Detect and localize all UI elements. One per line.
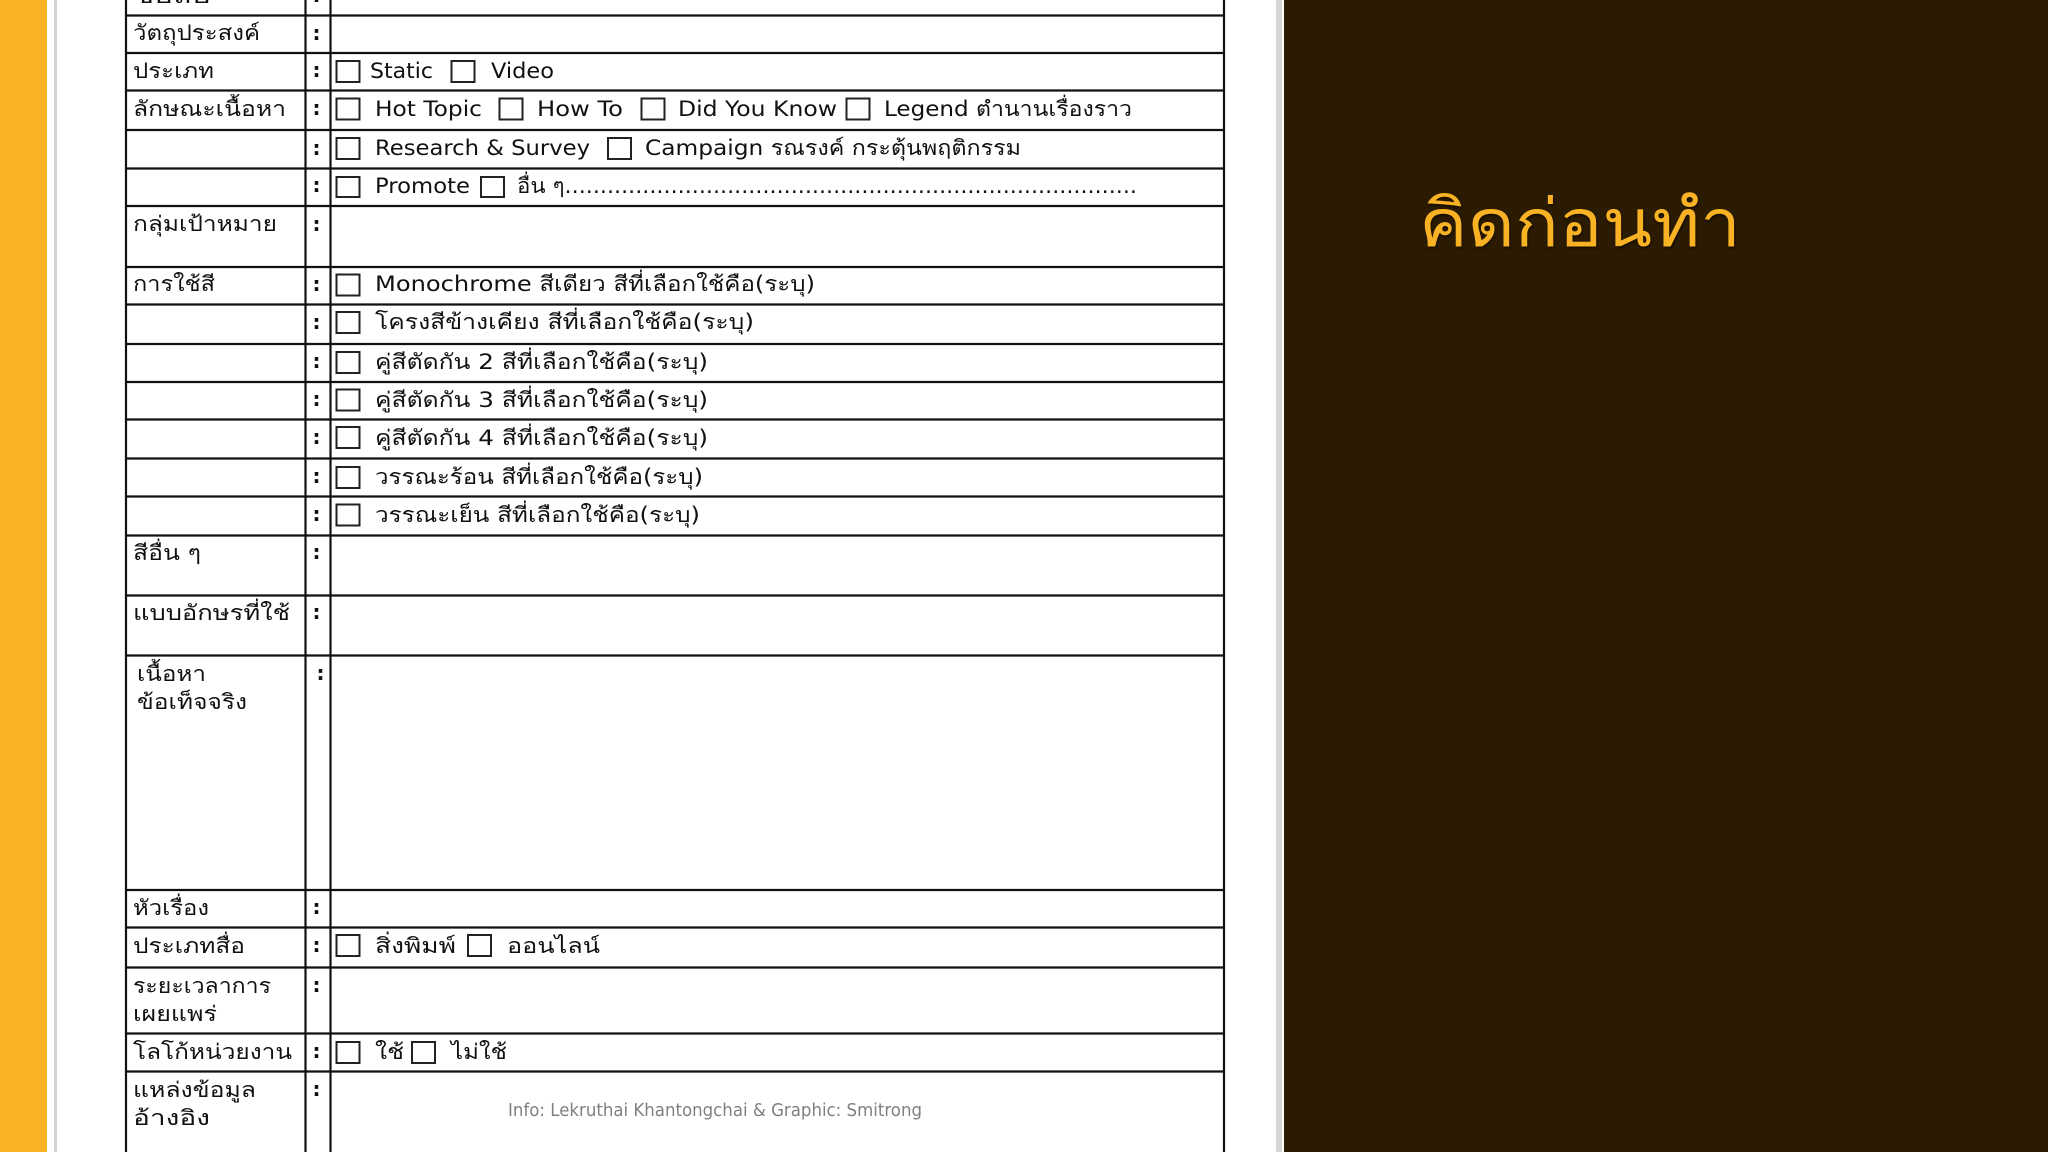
row: content character: Hot Topic	[375, 97, 482, 121]
row: colour monochrome: :	[312, 272, 320, 296]
row: research and campaign: Campaign รณรงค์ กระตุ้นพฤติกรรม	[645, 136, 1021, 161]
row: headline: หัวเรื่อง	[133, 893, 209, 920]
row: headline	[133, 893, 320, 920]
row: contrast 2 colours: :	[312, 349, 320, 373]
row: typeface	[133, 598, 320, 625]
row: contrast 4 colours: :	[312, 425, 320, 449]
row: media type	[133, 931, 600, 958]
credit line: Info: Lekruthai Khantongchai & Graphic: Smitrong	[508, 1100, 922, 1121]
row: content character: ลักษณะเนื้อหา	[133, 94, 286, 121]
row: agency logo: ใช้	[375, 1040, 404, 1064]
row: media type: ออนไลน์	[507, 934, 600, 958]
row: contrast 3 colours: คู่สีตัดกัน 3 สีที่เลือกใช้คือ(ระบุ)	[375, 385, 708, 413]
row: typeface: แบบอักษรที่ใช้	[133, 598, 290, 625]
row: publishing period: ระยะเวลาการ	[133, 974, 271, 998]
row: contrast 4 colours: คู่สีตัดกัน 4 สีที่เลือกใช้คือ(ระบุ)	[375, 423, 708, 451]
row: cool tones: :	[312, 502, 320, 526]
row: references: อ้างอิง	[133, 1106, 210, 1130]
row: content character: Did You Know	[678, 97, 837, 121]
row: typeface: :	[312, 600, 320, 624]
row: research and campaign: :	[312, 136, 320, 160]
row: warm tones	[312, 462, 703, 490]
row: content facts: เนื้อหา	[137, 659, 206, 686]
form table grid	[126, 0, 1224, 1152]
row: promote and other	[312, 171, 1137, 198]
row: references	[133, 1077, 320, 1130]
row: analogous colours	[312, 307, 754, 335]
row: contrast 3 colours	[312, 385, 708, 413]
row: research and campaign	[312, 136, 1021, 161]
row: media type: สิ่งพิมพ์	[375, 931, 456, 958]
row: research and campaign: Research & Survey	[375, 136, 590, 160]
row: type	[133, 58, 554, 83]
row: type: ประเภท	[133, 59, 214, 83]
row: target audience: :	[312, 212, 320, 236]
row: contrast 2 colours: คู่สีตัดกัน 2 สีที่เลือกใช้คือ(ระบุ)	[375, 347, 708, 375]
row: colour monochrome	[133, 269, 815, 297]
row: colour monochrome: Monochrome สีเดียว สีที่เลือกใช้คือ(ระบุ)	[375, 269, 815, 297]
row: colour monochrome: การใช้สี	[133, 272, 215, 296]
row: objective: วัตถุประสงค์	[133, 21, 260, 46]
row: cool tones: วรรณะเย็น สีที่เลือกใช้คือ(ระบุ)	[375, 500, 700, 528]
row: target audience	[133, 212, 320, 237]
row: headline: :	[312, 895, 320, 919]
row: type: :	[312, 58, 320, 82]
row: promote and other: Promote	[375, 174, 470, 198]
row: content facts	[137, 659, 324, 714]
row: warm tones: วรรณะร้อน สีที่เลือกใช้คือ(ระบุ)	[375, 462, 703, 490]
row: analogous colours: โครงสีข้างเคียง สีที่เลือกใช้คือ(ระบุ)	[375, 307, 754, 335]
row: objective	[133, 21, 320, 46]
row: agency logo: :	[312, 1039, 320, 1063]
row: references: แหล่งข้อมูล	[133, 1078, 256, 1103]
row: promote and other: อื่น ๆ.................................................................................	[517, 171, 1137, 198]
row: contrast 2 colours	[312, 347, 708, 375]
row: promote and other: :	[312, 173, 320, 197]
row: media type: ประเภทสื่อ	[133, 931, 245, 958]
yellow side band	[0, 0, 47, 1152]
row: other colours: สีอื่น ๆ	[133, 538, 201, 565]
row: content facts: :	[316, 661, 324, 685]
left page edge	[54, 0, 57, 1152]
row: content character: How To	[537, 97, 623, 121]
row: objective: :	[312, 21, 320, 45]
row: analogous colours: :	[312, 310, 320, 334]
row: cool tones	[312, 500, 700, 528]
row: agency logo	[133, 1039, 507, 1064]
row: other colours	[133, 538, 320, 565]
row: warm tones: :	[312, 464, 320, 488]
row: content character	[133, 94, 1132, 121]
row: content facts: ข้อเท็จจริง	[137, 688, 247, 714]
row: contrast 4 colours	[312, 423, 708, 451]
right page edge	[1276, 0, 1282, 1152]
row: type: Video	[491, 59, 554, 83]
title: คิดก่อนทำ	[1419, 185, 1741, 262]
row: type: Static	[370, 59, 433, 83]
row: media type: :	[312, 933, 320, 957]
row: content character: :	[312, 96, 320, 120]
row: contrast 3 colours: :	[312, 387, 320, 411]
row: agency logo: โลโก้หน่วยงาน	[133, 1040, 292, 1064]
row: agency logo: ไม่ใช้	[449, 1040, 507, 1064]
row: publishing period: เผยแพร่	[133, 1002, 217, 1026]
row: references: :	[312, 1077, 320, 1101]
row: content character: Legend ตำนานเรื่องราว	[884, 94, 1132, 121]
row: publishing period	[133, 973, 320, 1026]
row: publishing period: :	[312, 973, 320, 997]
row: clipped top label	[133, 0, 320, 8]
row: other colours: :	[312, 540, 320, 564]
row: target audience: กลุ่มเป้าหมาย	[133, 212, 277, 237]
